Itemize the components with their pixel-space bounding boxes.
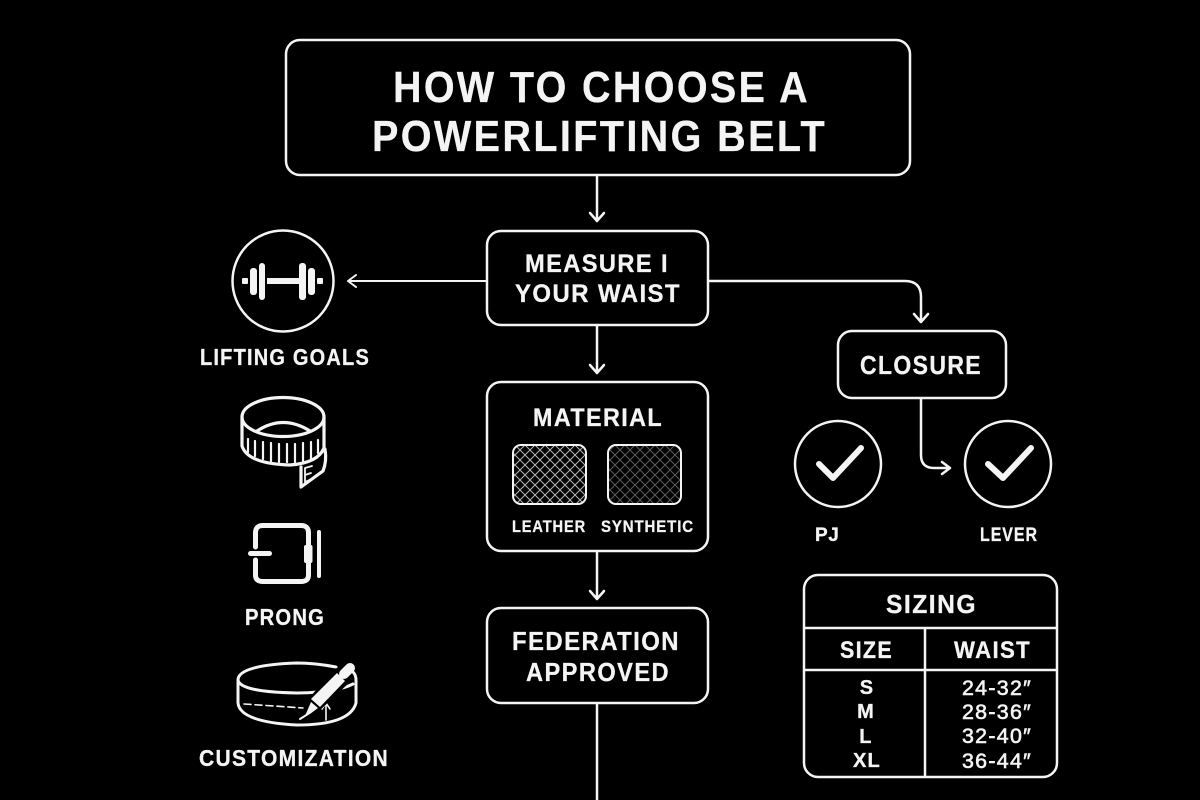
waist column <box>962 677 1032 773</box>
arrow: measure to material <box>590 326 604 373</box>
label: synthetic: SYNTHETIC <box>601 517 694 536</box>
arrow: closure to lever <box>921 399 950 474</box>
size column: M <box>857 701 875 723</box>
label: PJ: PJ <box>815 525 840 546</box>
box: measure your waist: YOUR WAIST <box>515 280 681 308</box>
box: federation approved: FEDERATION <box>512 626 680 656</box>
icon: belt with pen <box>238 663 356 725</box>
column heads <box>840 637 1031 664</box>
label: lifting goals: LIFTING GOALS <box>200 344 370 370</box>
size column: S <box>860 677 874 699</box>
heading: material: MATERIAL <box>533 404 663 432</box>
arrow: measure to closure <box>709 281 928 322</box>
waist column: 28-36″ <box>962 701 1032 724</box>
icon: lever check <box>965 421 1051 507</box>
icon: PJ check <box>795 421 881 507</box>
heading: sizing: SIZING <box>886 589 977 619</box>
panel: material <box>487 382 708 551</box>
box: closure: CLOSURE <box>860 350 982 380</box>
line: federation downward <box>596 704 598 800</box>
arrow: title to measure <box>590 176 604 221</box>
box: closure <box>838 331 1006 398</box>
box: measure your waist <box>487 231 708 325</box>
title box <box>286 40 910 175</box>
title text <box>372 63 827 161</box>
table: sizing <box>804 575 1057 777</box>
size column: L <box>859 726 873 748</box>
title text: HOW TO CHOOSE A <box>393 63 810 112</box>
column heads: SIZE <box>840 637 893 664</box>
waist column: 24-32″ <box>962 677 1032 700</box>
box: federation approved: APPROVED <box>526 657 670 687</box>
column heads: WAIST <box>954 637 1031 664</box>
waist column: 36-44″ <box>962 750 1032 773</box>
icon: measuring tape <box>242 398 326 487</box>
size column: XL <box>853 750 881 772</box>
swatch: synthetic <box>608 445 681 504</box>
arrow: measure to lifting goals <box>348 275 486 287</box>
label: customization: CUSTOMIZATION <box>199 745 389 771</box>
title text: POWERLIFTING BELT <box>372 112 827 161</box>
box: federation approved <box>487 608 708 703</box>
icon: prong buckle <box>248 526 321 582</box>
icon: barbell in circle <box>232 230 334 332</box>
swatch: leather <box>513 445 586 504</box>
waist column: 32-40″ <box>962 725 1032 748</box>
label: lever: LEVER <box>980 525 1038 546</box>
arrow: material to federation <box>590 552 604 599</box>
label: leather: LEATHER <box>512 517 586 536</box>
label: prong: PRONG <box>245 604 325 630</box>
size column <box>853 677 881 772</box>
box: measure your waist: MEASURE I <box>525 250 669 278</box>
